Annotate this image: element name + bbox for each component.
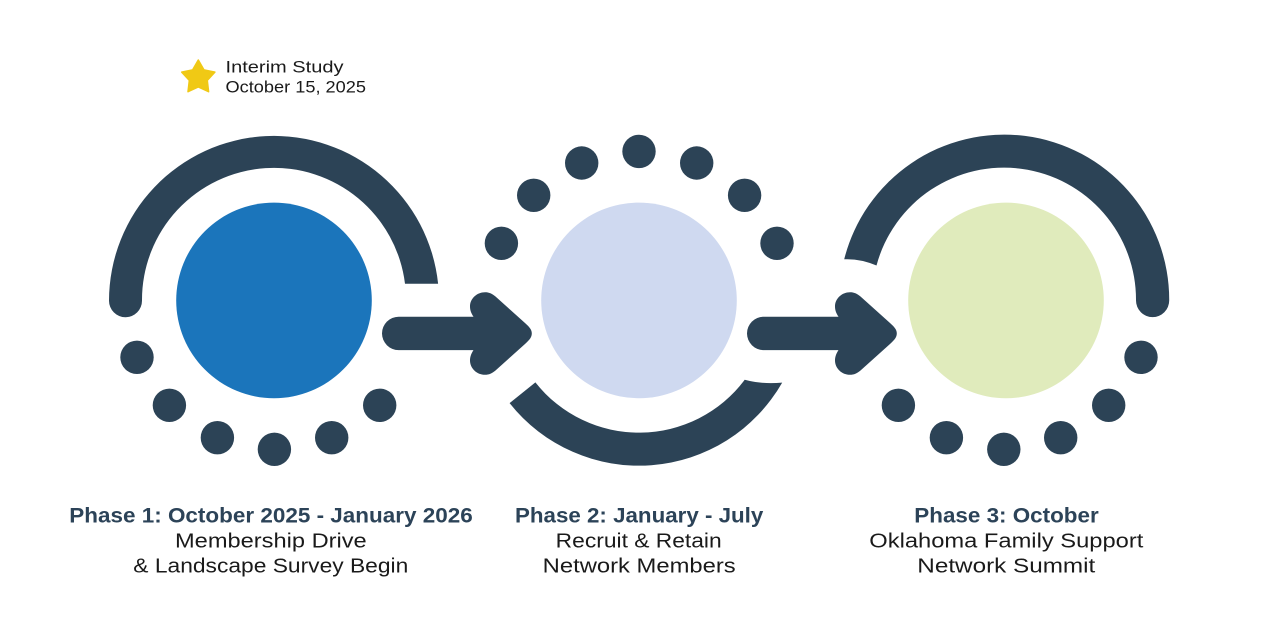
text: phase 1 line 1: Membership Drive <box>175 530 367 552</box>
arc: phase 1 upper ring <box>109 136 438 317</box>
arrow: phase 1 to phase 2 <box>382 292 532 375</box>
panel: phase 3 diagram <box>844 135 1169 466</box>
dots: phase 2 upper ring <box>485 135 794 260</box>
text: phase 1 line 2: & Landscape Survey Begin <box>133 556 408 578</box>
arc: phase 2 lower ring <box>510 380 782 466</box>
heading: phase 2: Phase 2: January - July <box>515 505 764 528</box>
text block: phase 2 <box>515 505 764 578</box>
dots: phase 3 lower ring <box>882 341 1158 466</box>
circle: phase 3 green <box>908 203 1104 398</box>
heading: phase 3: Phase 3: October <box>914 505 1099 528</box>
callout: interim study milestone <box>182 57 366 97</box>
circle: phase 2 periwinkle <box>541 203 737 398</box>
panel: phase 2 diagram <box>485 135 794 466</box>
arrow: phase 2 to phase 3 <box>747 292 897 375</box>
text block: phase 1 <box>69 505 473 578</box>
text: interim study date: October 15, 2025 <box>226 78 366 97</box>
text: phase 3 line 2: Network Summit <box>917 556 1096 578</box>
icon: yellow star <box>182 60 215 92</box>
panel: phase 1 diagram <box>109 136 438 466</box>
arc: phase 3 upper ring <box>844 135 1169 317</box>
dots: phase 1 lower ring <box>120 341 396 466</box>
text: phase 2 line 1: Recruit & Retain <box>556 530 722 552</box>
text: phase 2 line 2: Network Members <box>543 556 736 578</box>
heading: phase 1: Phase 1: October 2025 - January 2026 <box>69 505 473 528</box>
circle: phase 1 blue <box>176 203 372 398</box>
text: phase 3 line 1: Oklahoma Family Support <box>869 530 1144 552</box>
text: interim study title: Interim Study <box>226 57 344 76</box>
text block: phase 3 <box>869 505 1144 578</box>
